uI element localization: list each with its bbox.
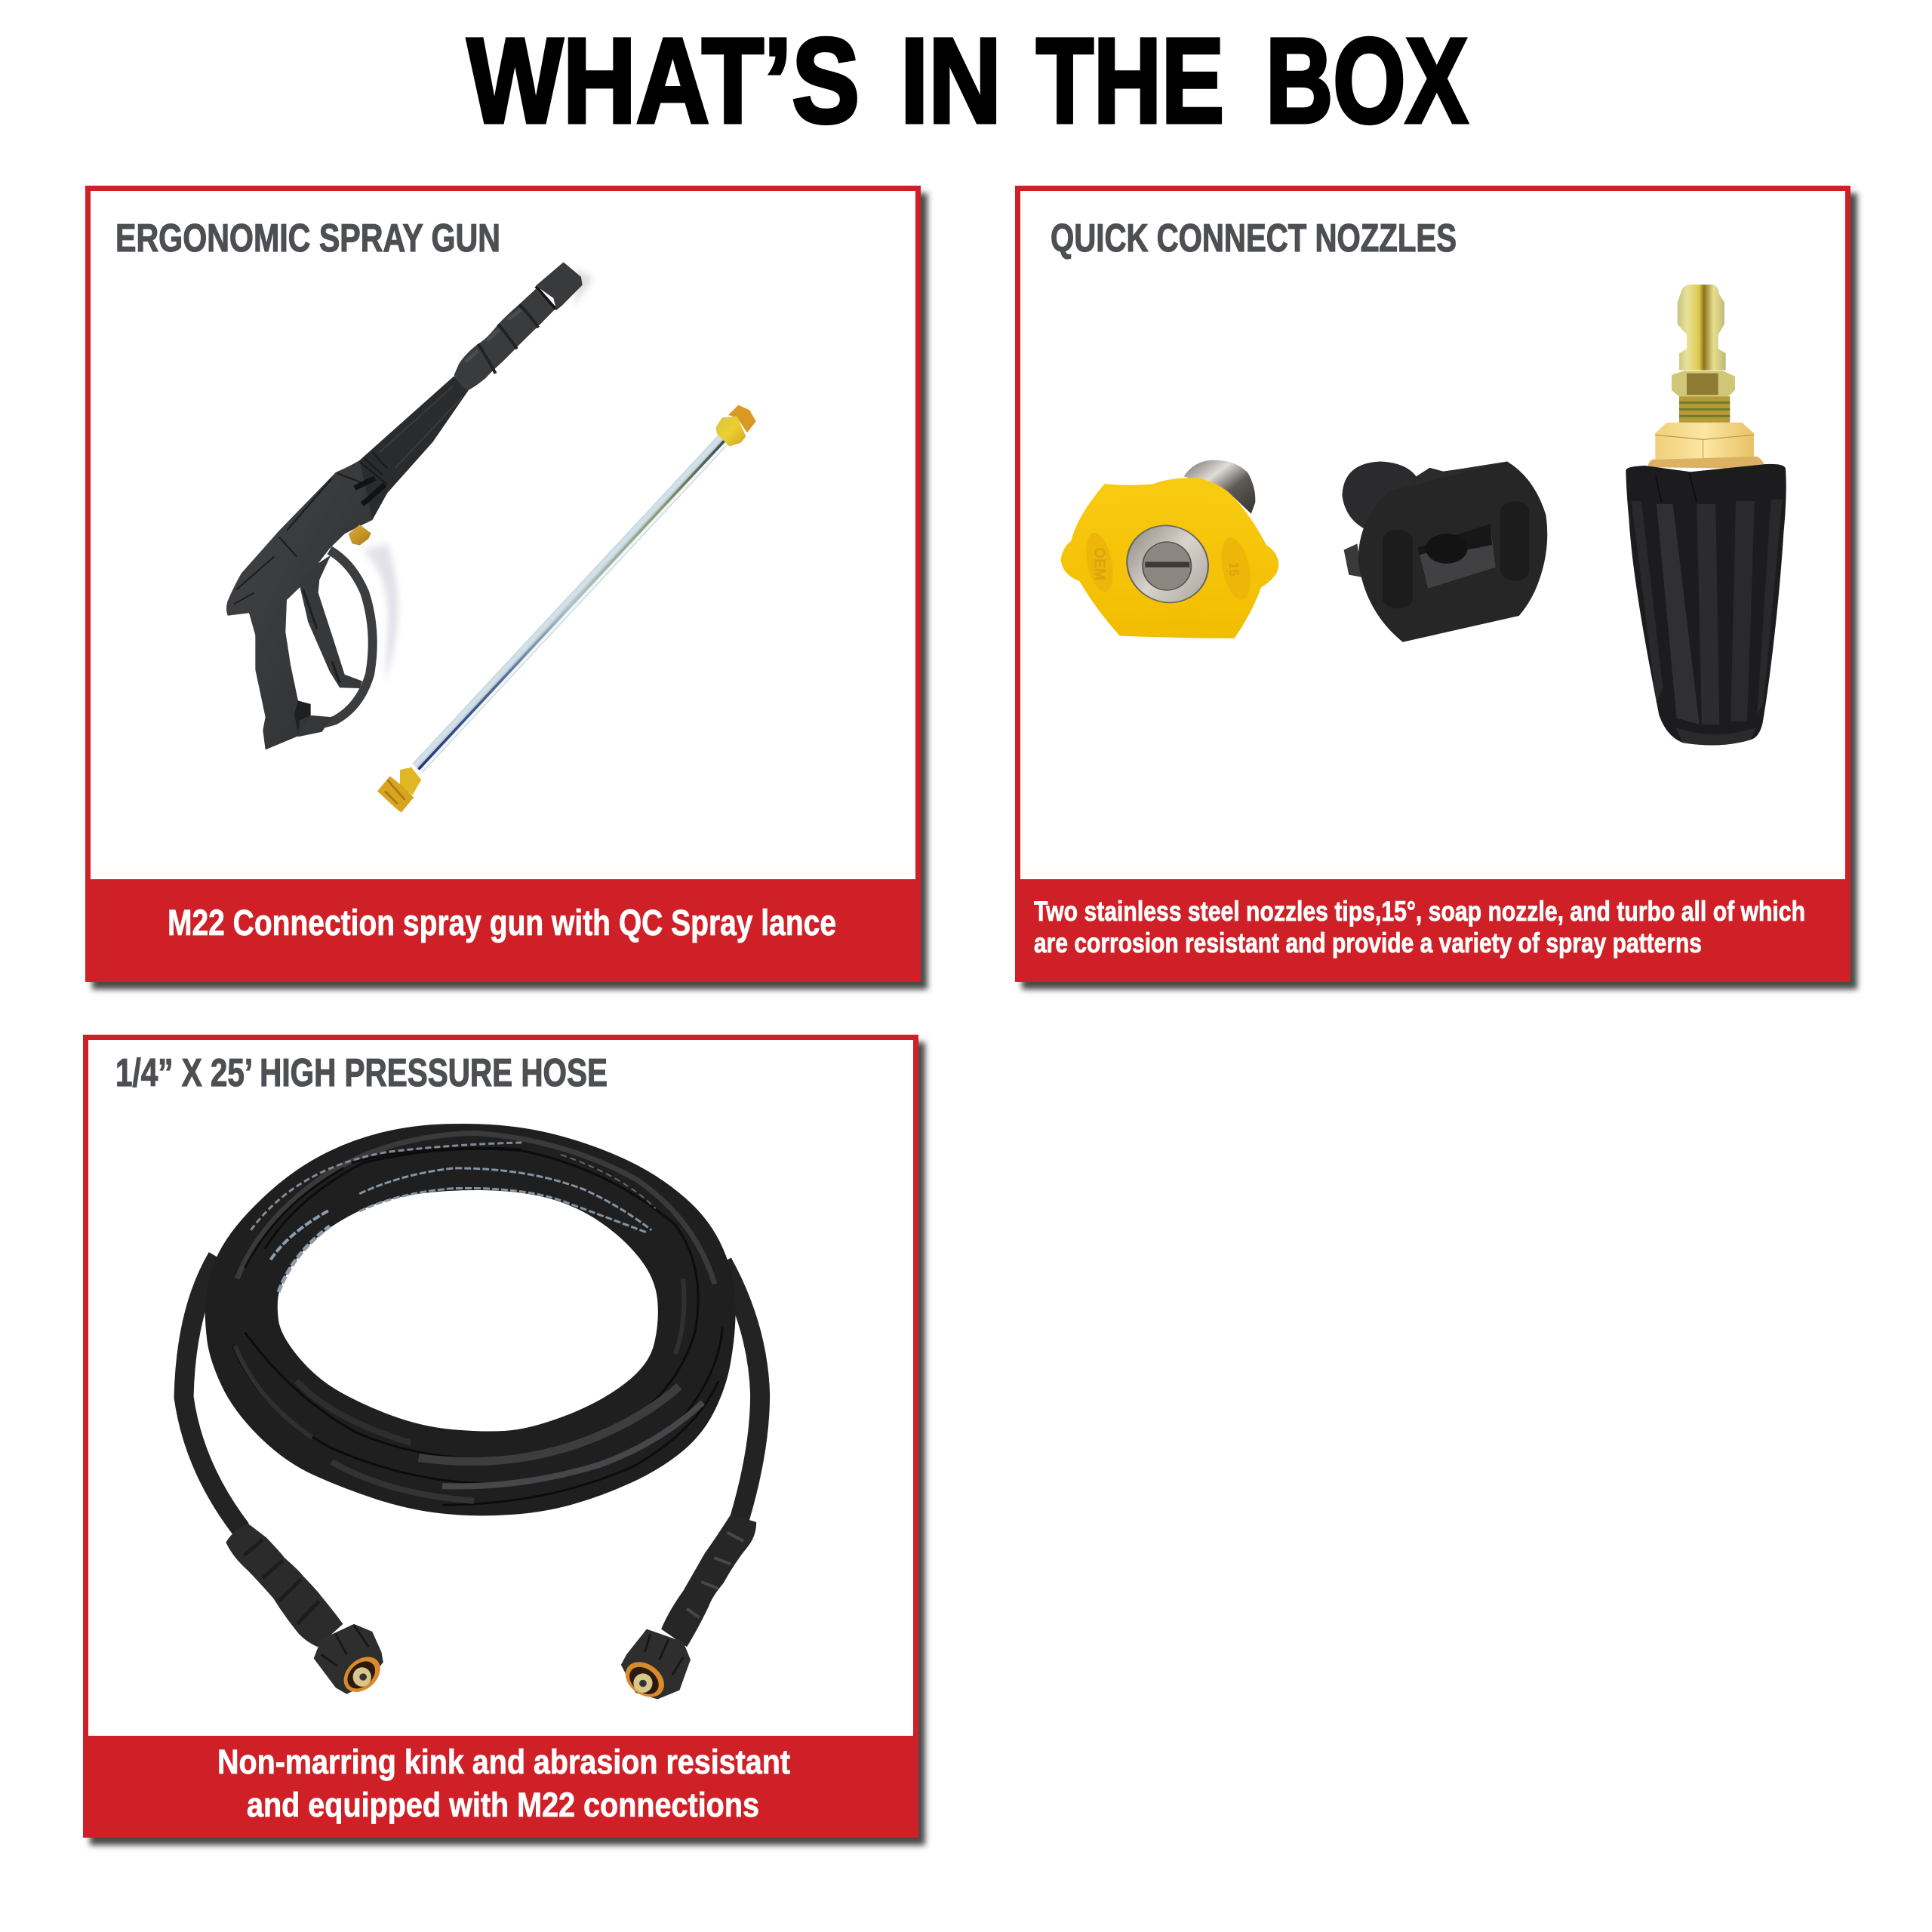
icon: left hose fitting [226, 1524, 387, 1696]
panel: ergonomic spray gun [85, 186, 928, 989]
brass hex [1655, 423, 1754, 460]
illustration: spray lance [377, 405, 756, 813]
icon: yellow 15 degree nozzle: OEM [1091, 547, 1108, 580]
rubber body [1626, 464, 1786, 746]
title: WHAT’S [467, 13, 860, 148]
barrel [352, 376, 469, 520]
caption bar: are corrosion resistant and provide a variety of spray patterns [1034, 928, 1702, 958]
icon: right hose fitting [618, 1515, 756, 1701]
lance nut bottom [377, 768, 421, 813]
heading: ergonomic spray gun: ERGONOMIC SPRAY GUN [115, 217, 500, 260]
title: THE [1036, 13, 1224, 148]
panel: high pressure hose [83, 1035, 925, 1845]
caption bar: Non-marring kink and abrasion resistant [217, 1743, 790, 1781]
illustration: coiled hose [184, 1124, 760, 1529]
caption bar [85, 879, 921, 982]
spray nut [536, 262, 583, 310]
panel: quick connect nozzles [1015, 186, 1857, 989]
icon: turbo nozzle [1626, 285, 1786, 746]
coil [205, 1124, 736, 1515]
caption bar [83, 1736, 918, 1838]
guard [300, 550, 373, 726]
heading: quick connect nozzles: QUICK CONNECT NOZZLES [1051, 217, 1457, 260]
title: IN [900, 13, 1001, 148]
icon: black soap nozzle [1342, 461, 1547, 642]
grip [454, 289, 555, 390]
thread [1679, 396, 1730, 423]
caption bar: M22 Connection spray gun with QC Spray lance [168, 903, 836, 943]
icon: yellow 15 degree nozzle [1061, 460, 1278, 638]
caption bar [1015, 879, 1850, 982]
title: BOX [1266, 13, 1468, 148]
illustration: spray gun [226, 262, 594, 750]
flange [1647, 457, 1764, 469]
brass fitting [349, 525, 371, 545]
printed markings [251, 1143, 656, 1292]
hex nut [1672, 371, 1735, 396]
lance nut top [715, 405, 756, 447]
quick connect plug [1678, 285, 1726, 371]
title [467, 13, 1468, 148]
hose tails [184, 1257, 241, 1529]
icon: yellow 15 degree nozzle: 15 [1226, 562, 1241, 577]
body and handle [226, 460, 372, 750]
caption bar: and equipped with M22 connections [247, 1786, 759, 1824]
coil windings [233, 1133, 722, 1505]
trigger [300, 555, 362, 688]
heading: high pressure hose: 1/4” X 25’ HIGH PRESSURE HOSE [115, 1051, 608, 1095]
